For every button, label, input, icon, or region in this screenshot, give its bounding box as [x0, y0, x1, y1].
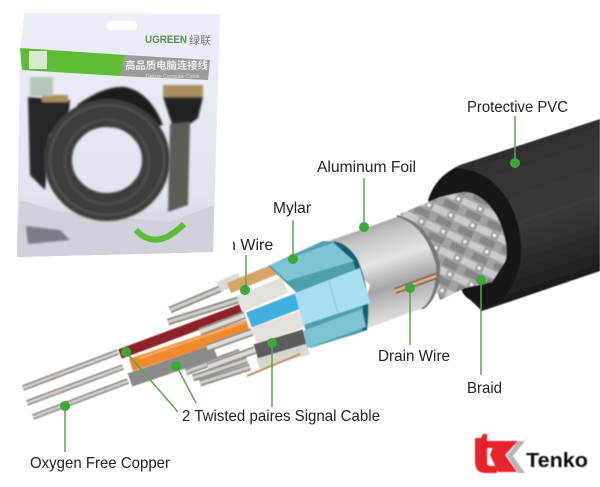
label: 2 Twisted paires Signal Cable [121, 338, 380, 425]
label: Drain Wire [378, 283, 450, 365]
foil lower bag [17, 200, 214, 257]
label: Aluminum Foil: Aluminum Foil [317, 159, 416, 176]
cable coil [50, 87, 164, 215]
foil back rim [397, 215, 440, 309]
green band [20, 48, 125, 76]
bare wire strands behind [168, 288, 250, 383]
grey title band [120, 55, 210, 80]
right connector cable [163, 85, 203, 212]
label: Mylar [273, 200, 312, 264]
aluminum foil [323, 217, 436, 332]
brand logo: UGREEN [145, 34, 187, 46]
bare wire strands front [200, 315, 255, 367]
label: Drain Wire: Drain Wire [378, 348, 450, 365]
colored wires [219, 268, 308, 376]
hang hole [107, 21, 137, 30]
label: Aluminum Foil [317, 159, 416, 232]
label: Braid: Braid [467, 380, 502, 397]
green arc sticker [136, 224, 184, 240]
grey title band: 高品质电脑连接线 [125, 59, 208, 72]
brand logo: 绿联 [189, 33, 211, 47]
labels and leader lines [30, 99, 568, 472]
grey title band: Deluxe Computer Cable [146, 74, 200, 80]
label: Protective PVC [467, 99, 568, 168]
copper strands [23, 352, 128, 417]
dark foil shapes [26, 226, 70, 244]
drain wire [395, 276, 436, 291]
cable illustration [23, 119, 600, 417]
brand logo [145, 33, 211, 47]
label: Protective PVC: Protective PVC [467, 99, 568, 116]
left connector cable [28, 77, 70, 190]
label: Mylar: Mylar [273, 200, 312, 217]
label: Drain Wire partly hidden [233, 238, 273, 295]
twisted pair wires [120, 309, 248, 380]
product package [17, 13, 220, 257]
outer PVC jacket [428, 119, 600, 311]
braid shield [400, 192, 507, 300]
mylar wraps [268, 241, 370, 348]
logo: Tenko: Tenko [526, 450, 588, 472]
label: 2 Twisted paires Signal Cable: 2 Twisted paires Signal Cable [182, 408, 380, 425]
label: Drain Wire partly hidden: n Wire [227, 237, 273, 254]
label: Braid [467, 275, 502, 397]
label: Oxygen Free Copper [30, 401, 171, 472]
bag body [17, 13, 220, 257]
label: Oxygen Free Copper: Oxygen Free Copper [30, 455, 171, 472]
logo: Tenko [475, 434, 588, 473]
